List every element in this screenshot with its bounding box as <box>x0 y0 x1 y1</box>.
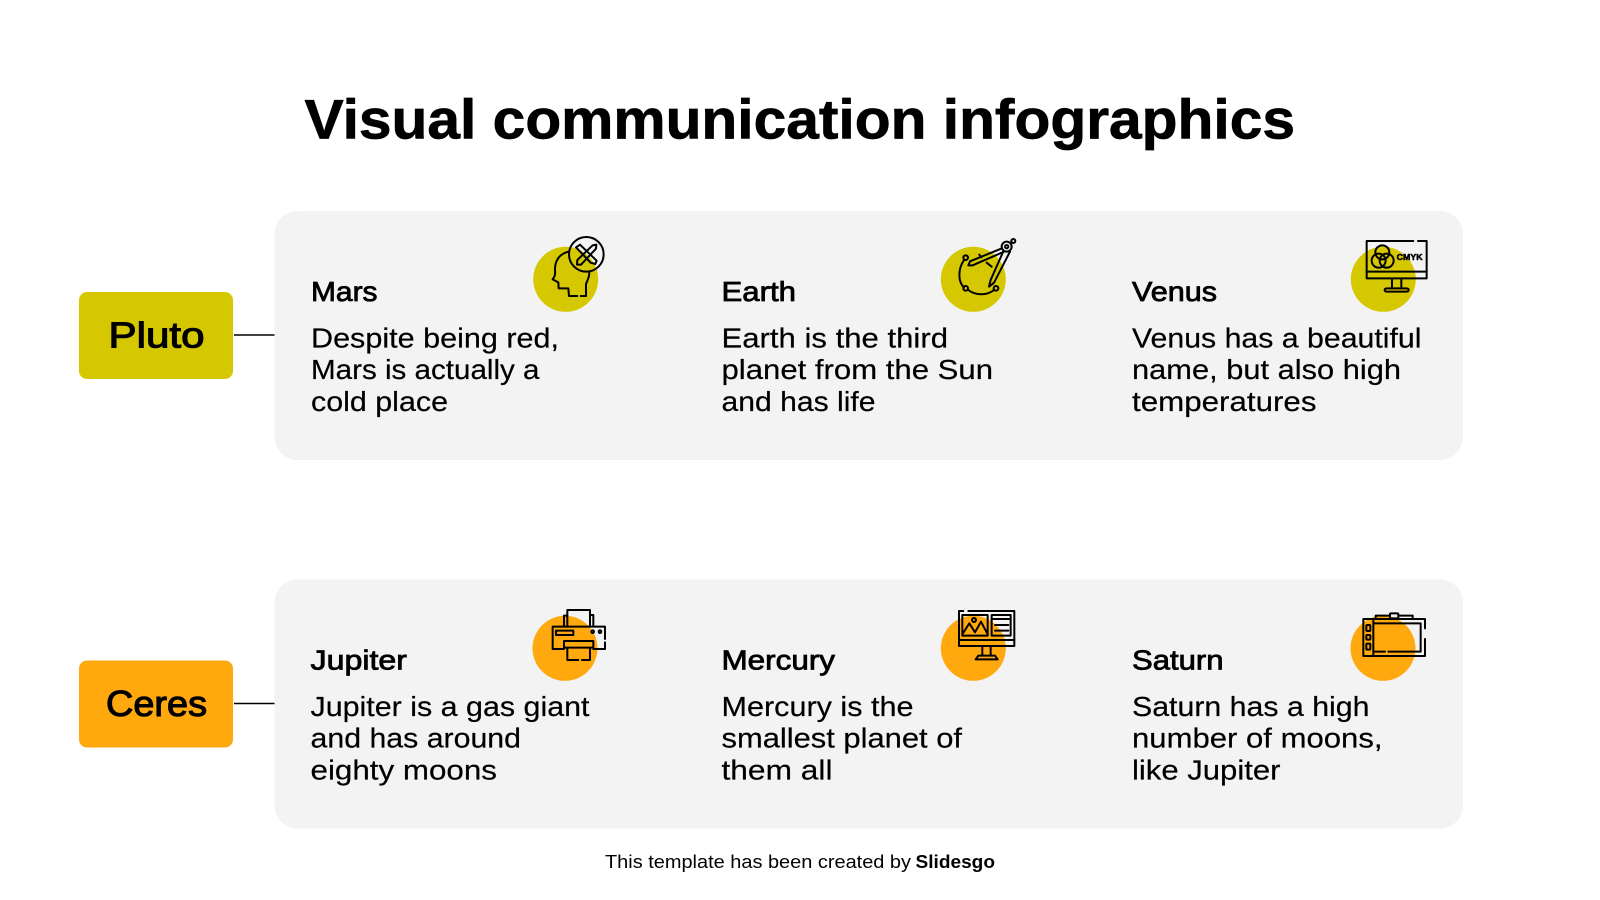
item: Mars <box>311 276 559 417</box>
item: Mercury: Mercury <box>722 644 835 676</box>
icon: compass <box>941 239 1015 312</box>
item: Venus: temperatures <box>1132 386 1316 417</box>
label: Pluto: Pluto <box>108 314 204 356</box>
connector: Pluto <box>234 334 274 336</box>
icon: image editor monitor <box>941 611 1014 681</box>
item: Mercury: Mercury is the <box>722 691 914 722</box>
item: Venus: Venus <box>1132 276 1217 307</box>
label: Pluto <box>79 292 233 379</box>
item: Jupiter: Jupiter is a gas giant <box>310 691 590 722</box>
item: Mercury: them all <box>722 754 832 786</box>
item: Venus <box>1132 276 1422 417</box>
panel: Pluto group <box>79 211 1463 460</box>
item: Earth: planet from the Sun <box>722 354 993 385</box>
item: Saturn <box>1132 644 1382 786</box>
icon: printer <box>532 610 605 681</box>
label: Ceres: Ceres <box>106 683 207 724</box>
icon: CMYK monitor <box>1351 241 1427 312</box>
item: Earth: Earth <box>722 276 796 307</box>
item: Mercury <box>722 644 962 786</box>
item: Mars: cold place <box>311 386 448 417</box>
item: Earth <box>722 276 993 417</box>
footer credit: Slidesgo <box>916 851 995 872</box>
title: Visual communication infographics <box>304 88 1295 150</box>
item: Saturn: Saturn <box>1132 644 1224 676</box>
icon: head with pencils <box>533 237 604 312</box>
item: Mercury: smallest planet of <box>722 722 962 754</box>
icon: graphics tablet <box>1350 613 1425 681</box>
item: Mars: Mars <box>311 276 378 307</box>
item: Earth: Earth is the third <box>722 322 948 354</box>
panel: Ceres group <box>79 580 1463 828</box>
item: Jupiter: eighty moons <box>310 754 497 786</box>
item: Jupiter: and has around <box>310 722 521 754</box>
item: Saturn: number of moons, <box>1132 722 1382 754</box>
connector: Ceres <box>234 702 274 704</box>
icon: CMYK monitor: CMYK <box>1397 252 1423 262</box>
footer credit: This template has been created by <box>605 851 912 872</box>
item: Saturn: like Jupiter <box>1132 754 1280 786</box>
item: Jupiter <box>310 644 590 786</box>
item: Venus: name, but also high <box>1132 354 1401 385</box>
item: Mars: Despite being red, <box>311 322 559 354</box>
label: Ceres <box>79 660 233 748</box>
item: Jupiter: Jupiter <box>310 644 407 676</box>
item: Saturn: Saturn has a high <box>1132 691 1370 722</box>
item: Earth: and has life <box>722 386 876 417</box>
panel background: Pluto <box>274 211 1463 460</box>
item: Venus: Venus has a beautiful <box>1132 322 1422 354</box>
panel background: Ceres <box>274 580 1463 828</box>
item: Mars: Mars is actually a <box>311 354 540 385</box>
